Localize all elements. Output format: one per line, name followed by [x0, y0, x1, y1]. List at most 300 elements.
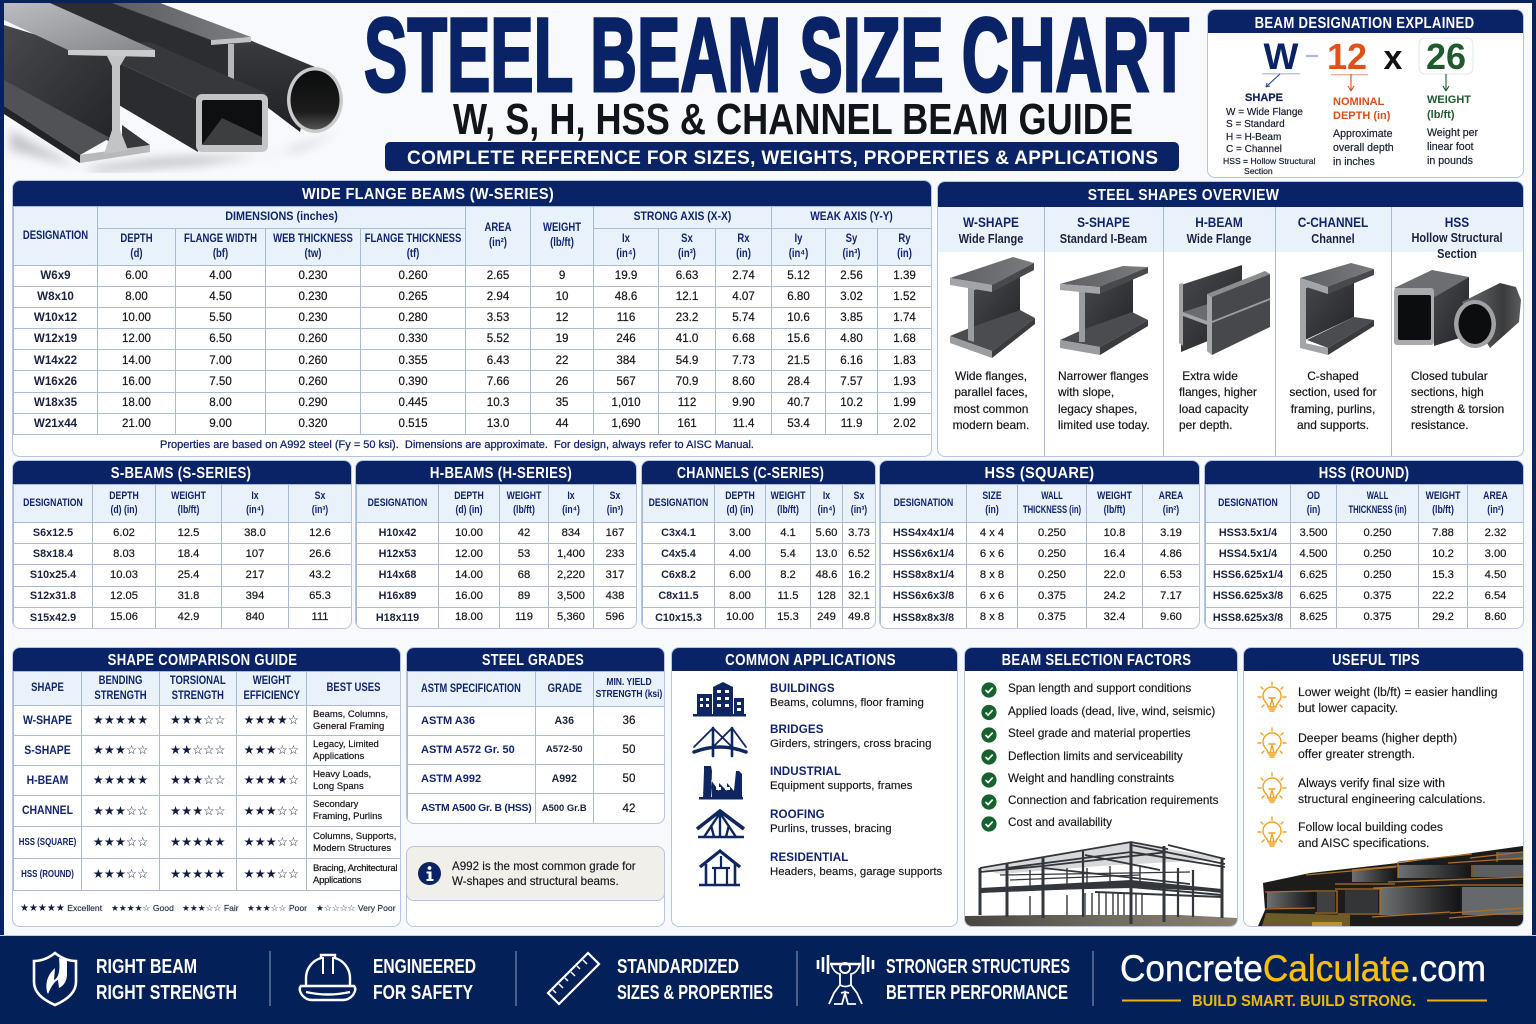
- table: S-series: 42.9: [178, 611, 199, 623]
- table: H-series: (lb/ft): [513, 504, 535, 516]
- table: S-series: 38.0: [244, 527, 266, 539]
- table: H-series: 3,500: [557, 590, 585, 602]
- table: H-series: DEPTH: [454, 490, 484, 502]
- table: H-series: 119: [515, 611, 533, 623]
- factor: weight: Weight and handling constraints: [1008, 772, 1174, 785]
- heading: HSS (SQUARE): [984, 465, 1094, 482]
- table: HSS round: 7.88: [1432, 527, 1454, 539]
- table: shape comparison: ★★★☆☆: [243, 866, 299, 881]
- description: H-beam: load capacity: [1179, 402, 1248, 416]
- table: W-series: 384: [616, 354, 636, 367]
- shape key: Section: [1244, 166, 1273, 176]
- description: HSS: sections, high: [1411, 385, 1484, 399]
- table: S-series: 15.06: [110, 611, 138, 623]
- table: HSS round: THICKNESS (in): [1348, 504, 1407, 516]
- table: HSS round: HSS8.625x3/8: [1213, 612, 1283, 624]
- table: W-series: 44: [556, 417, 568, 430]
- nominal depth key: in inches: [1333, 156, 1375, 168]
- table: HSS square: WALL: [1041, 490, 1063, 502]
- description: HSS: Closed tubular: [1411, 369, 1488, 383]
- table: S-series: WEIGHT: [171, 490, 206, 502]
- weight key: linear foot: [1427, 141, 1474, 153]
- table: HSS round: HSS6.625x1/4: [1213, 569, 1283, 581]
- rating legend: ★★★★★ Excellent: [20, 903, 102, 914]
- table: W-series: 22: [556, 354, 568, 367]
- subtitle: W, S, H, HSS & CHANNEL BEAM GUIDE: [453, 95, 1133, 144]
- table: HSS round: (lb/ft): [1432, 504, 1454, 516]
- table: H-series: 89: [518, 590, 530, 602]
- table: W-series: 11.9: [841, 417, 862, 430]
- application: bridges: Girders, stringers, cross bracing: [770, 738, 931, 750]
- weight key: [1427, 94, 1479, 167]
- footer text: right beam: [96, 956, 237, 1004]
- table: shape comparison: Beams, Columns,: [313, 708, 388, 720]
- table: C-series: 48.6: [816, 569, 837, 581]
- table: W-series: FLANGE WIDTH: [184, 232, 257, 245]
- table: HSS round: 0.250: [1364, 548, 1392, 560]
- table: C-series: 15.3: [777, 611, 799, 623]
- table: HSS square: 8 x 8: [980, 611, 1004, 623]
- description: HSS: strength & torsion: [1411, 402, 1504, 416]
- brand logo: ConcreteCalculate.com: [1120, 948, 1486, 989]
- icon: ruler: [548, 953, 599, 1004]
- heading: [672, 648, 957, 671]
- tip 1: Lower weight (lb/ft) = easier handling: [1298, 685, 1498, 699]
- table: W-series: 0.260: [298, 354, 328, 367]
- table: shape comparison: Heavy Loads,: [313, 768, 371, 780]
- table: HSS square: THICKNESS (in): [1023, 504, 1081, 516]
- table: W-series: STRONG AXIS (X-X): [634, 210, 731, 223]
- table: HSS round: 29.2: [1432, 611, 1454, 623]
- designation example W-12x26: 26: [1426, 36, 1466, 77]
- table: HSS square: 0.375: [1038, 590, 1066, 602]
- application: residential: RESIDENTIAL: [770, 851, 848, 864]
- heading: [13, 648, 400, 671]
- callout: A992 note: [407, 847, 664, 900]
- designation example W-12x26: x: [1384, 39, 1403, 77]
- thin back I-beam: [45, 3, 251, 96]
- weight key: in pounds: [1427, 155, 1473, 167]
- table: W-series: 14.00: [122, 354, 151, 367]
- icon: H-beam: [1179, 265, 1270, 355]
- table: W-series: 0.390: [399, 375, 428, 388]
- table: W-series: AREA: [485, 221, 512, 234]
- panel: H-beams: [356, 461, 636, 628]
- table: W-series: 3.85: [840, 311, 863, 324]
- table: steel grades: A36: [555, 715, 574, 727]
- table: HSS round: 22.2: [1432, 590, 1454, 602]
- column label: C-channel: Channel: [1311, 232, 1355, 246]
- table: C-series: [642, 484, 875, 628]
- weight key: WEIGHT: [1427, 94, 1471, 106]
- description: H-beam: per depth.: [1179, 418, 1233, 432]
- table: C-series: 249: [817, 611, 836, 623]
- table: W-series: (in): [736, 247, 751, 260]
- table: HSS square: 16.4: [1104, 548, 1125, 560]
- description: C-channel: [1289, 369, 1377, 432]
- heading: COMMON APPLICATIONS: [725, 652, 896, 669]
- table: S-series: 394: [246, 590, 264, 602]
- table: S-series: (in³): [312, 504, 328, 516]
- footer text: right beam: RIGHT STRENGTH: [96, 982, 237, 1004]
- table: HSS round: 3.00: [1485, 548, 1506, 560]
- table: HSS square: 4.86: [1160, 548, 1182, 560]
- table: H-series: 68: [518, 569, 530, 581]
- table: W-series: 1.99: [893, 396, 916, 409]
- table: steel grades: A500 Gr.B: [542, 802, 587, 813]
- table: H-series: H18x119: [376, 612, 419, 624]
- table: W-series: 7.73: [732, 354, 755, 367]
- shape key: [1223, 92, 1316, 176]
- table: shape comparison: TORSIONAL: [170, 674, 226, 687]
- table: HSS square: 8 x 8: [980, 569, 1004, 581]
- table: HSS square: HSS6x6x3/8: [893, 590, 954, 602]
- table: W-series: 1.93: [893, 375, 916, 388]
- panel: common applications: [672, 648, 957, 926]
- table: HSS square: 4 x 4: [980, 527, 1004, 539]
- table: shape comparison: STRENGTH: [94, 688, 147, 702]
- table: S-series: 43.2: [309, 569, 331, 581]
- rating legend: ★☆☆☆☆ Very Poor: [316, 903, 396, 914]
- table: W-series: (tf): [407, 247, 419, 260]
- table: S-series: S8x18.4: [33, 548, 73, 560]
- table: W-series: 21.5: [787, 354, 810, 367]
- table: shape comparison: ★★★☆☆: [243, 834, 299, 849]
- table: H-series: 167: [606, 527, 624, 539]
- footer text: right beam: RIGHT BEAM: [96, 956, 197, 978]
- table: shape comparison: STRENGTH: [172, 688, 224, 702]
- factor: applied loads: Applied loads (dead, live, wind, seismic): [1008, 705, 1215, 718]
- panel: HSS square: [880, 461, 1199, 628]
- table: W-series: (in): [897, 247, 912, 260]
- table: S-series: 31.8: [178, 590, 199, 602]
- table: H-series: 2,220: [557, 569, 585, 581]
- table: shape comparison: ★★★☆☆: [170, 772, 226, 787]
- panel: steel shapes overview: [938, 182, 1523, 456]
- table: W-series: Ry: [898, 232, 911, 245]
- table: S-series: 217: [246, 569, 264, 581]
- heading: [13, 181, 931, 206]
- description: H-beam: [1179, 369, 1257, 432]
- table: HSS square: 24.2: [1104, 590, 1125, 602]
- table: S-series: S15x42.9: [30, 612, 76, 624]
- table: H-series: (d) (in): [455, 504, 483, 516]
- table: HSS square: [880, 484, 1199, 628]
- table: shape comparison: ★★★☆☆: [93, 866, 148, 881]
- illustration: steel frame structure: [965, 842, 1237, 926]
- table: C-series: 8.2: [780, 569, 796, 581]
- table: W-series: 54.9: [676, 354, 698, 367]
- table: S-series: (lb/ft): [178, 504, 199, 516]
- table: H-series: 53: [518, 548, 530, 560]
- table: W-series: 161: [677, 417, 697, 430]
- table: C-series: (in³): [851, 504, 867, 516]
- icon: roofing truss: [697, 811, 744, 837]
- table: W-series: 0.260: [399, 269, 428, 282]
- table: W-series: 6.80: [787, 290, 810, 303]
- table: shape comparison: H-BEAM: [27, 774, 68, 787]
- heading: [642, 461, 875, 484]
- column label: W-shape: W-SHAPE: [963, 215, 1019, 230]
- table: steel grades: STRENGTH (ksi): [596, 689, 662, 700]
- table: C-series: C8x11.5: [658, 590, 699, 602]
- table: H-series: WEIGHT: [507, 490, 541, 502]
- application: bridges: BRIDGES: [770, 723, 824, 736]
- shape key: SHAPE: [1245, 92, 1283, 104]
- table: W-series: 246: [616, 332, 636, 345]
- footer text: stronger structures: BETTER PERFORMANCE: [886, 982, 1068, 1004]
- application: residential: Headers, beams, garage supports: [770, 866, 942, 878]
- heading: H-BEAMS (H-SERIES): [430, 465, 572, 482]
- table: shape comparison: ★★★☆☆: [93, 742, 148, 757]
- table: C-series: WEIGHT: [771, 490, 805, 502]
- table: W-series: 19: [556, 332, 568, 345]
- icon: W-shape beam: [950, 257, 1035, 358]
- table: H-series: H16x89: [379, 590, 416, 602]
- description: W-shape: [953, 369, 1029, 432]
- table: steel grades: ASTM A36: [421, 715, 475, 727]
- table: W-series: 112: [678, 396, 696, 409]
- table: W-series: 8.00: [209, 396, 232, 409]
- table: C-series: DEPTH: [725, 490, 755, 502]
- table: W-series: 116: [617, 311, 635, 324]
- table: C-series: 11.5: [778, 590, 798, 602]
- table: S-series: 6.02: [113, 527, 135, 539]
- heading: [407, 648, 664, 671]
- tip 2: Deeper beams (higher depth): [1298, 730, 1457, 744]
- table: H-series: 10.00: [455, 527, 483, 539]
- table: steel grades: 50: [623, 743, 635, 756]
- column label: W-shape: [958, 215, 1023, 246]
- table: W-series: 4.50: [209, 290, 232, 303]
- table: S-series: 111: [311, 611, 328, 623]
- table: shape comparison: ★★★★★: [93, 772, 148, 787]
- table: H-series: 12.00: [455, 548, 483, 560]
- table: S-series: (in⁴): [246, 504, 264, 516]
- table: C-series: 32.1: [848, 590, 870, 602]
- tip 1: but lower capacity.: [1298, 701, 1398, 715]
- table: S-series: 12.6: [309, 527, 331, 539]
- table: W-series: W6x9: [40, 269, 71, 282]
- illustration: stacked steel beams: [1258, 846, 1523, 926]
- shape key: C = Channel: [1226, 144, 1282, 155]
- table: W-series: (in⁴): [789, 247, 808, 260]
- table: W-series: (tw): [305, 247, 321, 260]
- icon: hard hat: [300, 955, 355, 1000]
- table: S-series: [13, 484, 351, 628]
- heading: [13, 461, 351, 484]
- footer text: standardized: SIZES & PROPERTIES: [617, 982, 773, 1004]
- table: steel grades: ASTM A500 Gr. B (HSS): [421, 803, 531, 814]
- heading: SHAPE COMPARISON GUIDE: [108, 652, 297, 669]
- table: HSS square: (lb/ft): [1104, 504, 1125, 516]
- table: shape comparison: WEIGHT: [252, 674, 290, 687]
- table: H-series: 42: [518, 527, 530, 539]
- table: W-series: 0.320: [298, 417, 328, 430]
- table: W-series: 567: [616, 375, 636, 388]
- table: H-series: 14.00: [455, 569, 483, 581]
- table: steel grades: 36: [623, 714, 635, 727]
- tip 4: and AISC specifications.: [1298, 836, 1429, 850]
- table: W-series: 41.0: [676, 332, 698, 345]
- table: HSS round: 2.32: [1485, 527, 1506, 539]
- factor: cost: Cost and availability: [1008, 816, 1112, 829]
- description: HSS: resistance.: [1411, 418, 1468, 432]
- table: W-series: Sy: [846, 232, 857, 245]
- rating legend: ★★★☆☆ Poor: [247, 903, 307, 914]
- table: HSS square: 3.19: [1160, 527, 1182, 539]
- table: steel grades: MIN. YIELD: [606, 676, 652, 688]
- table: W-series: 70.9: [676, 375, 698, 388]
- column label: H-beam: [1186, 215, 1251, 246]
- description: C-channel: section, used for: [1289, 385, 1377, 399]
- table: HSS square: 6.53: [1160, 569, 1182, 581]
- table: shape comparison: ★★★☆☆: [243, 803, 299, 818]
- table: H-series: 233: [606, 548, 624, 560]
- table: W-series: 9.00: [209, 417, 232, 430]
- table: C-series: C10x15.3: [655, 612, 702, 624]
- table: W-series: 2.74: [732, 269, 755, 282]
- table: shape comparison: ★★☆☆☆: [170, 742, 226, 757]
- table: W-series: 10: [556, 290, 568, 303]
- banner: COMPLETE REFERENCE FOR SIZES, WEIGHTS, PROPERTIES & APPLICATIONS: [407, 148, 1158, 169]
- description: C-channel: and supports.: [1297, 418, 1369, 432]
- table: W-series: W21x44: [34, 417, 77, 430]
- rectangular hollow section: [80, 42, 268, 152]
- table: HSS square: 7.17: [1160, 590, 1182, 602]
- heading: [880, 461, 1199, 484]
- heading: CHANNELS (C-SERIES): [677, 465, 824, 482]
- table: HSS round: 15.3: [1432, 569, 1454, 581]
- table: H-series: (in³): [607, 504, 623, 516]
- table: W-series: (in⁴): [616, 247, 636, 260]
- table: W-series: W16x26: [34, 375, 77, 388]
- table: W-series: Rx: [737, 232, 750, 245]
- heading: [938, 182, 1523, 207]
- table: shape comparison: ★★★☆☆: [93, 803, 148, 818]
- table: C-series: 13.0: [816, 548, 837, 560]
- table: C-series: 10.00: [726, 611, 754, 623]
- column label: S-shape: [1060, 215, 1147, 246]
- factor: connection: Connection and fabrication requirements: [1008, 794, 1219, 807]
- heading: [1205, 461, 1523, 484]
- table: H-series: DESIGNATION: [368, 497, 427, 509]
- table: HSS round: 0.375: [1364, 590, 1392, 602]
- description: H-beam: flanges, higher: [1179, 385, 1257, 399]
- table: W-series: 0.280: [399, 311, 428, 324]
- table: S-series: 840: [246, 611, 264, 623]
- column label: S-shape: Standard I-Beam: [1060, 232, 1147, 246]
- table: W-series: (in²): [489, 236, 507, 249]
- table: C-series: 4.1: [780, 527, 796, 539]
- table: W-series: (bf): [213, 247, 228, 260]
- table: H-series: Sx: [610, 490, 620, 502]
- icon: industrial: [699, 766, 743, 800]
- description: W-shape: parallel faces,: [954, 385, 1028, 399]
- panel: wide flange beams: [13, 181, 931, 456]
- designation example W-12x26: 12: [1327, 36, 1367, 77]
- application: residential: [770, 851, 942, 878]
- shape key: W = Wide Flange: [1226, 107, 1303, 118]
- table: W-series: WEAK AXIS (Y-Y): [810, 210, 893, 223]
- table: S-series: Ix: [251, 490, 259, 502]
- table: W-series: Ix: [622, 232, 630, 245]
- panel: beam designation explained: [1208, 10, 1523, 177]
- banner: [385, 142, 1179, 171]
- icon: info: [418, 862, 441, 885]
- table: W-series: 1,010: [612, 396, 641, 409]
- table: shape comparison: Legacy, Limited: [313, 738, 379, 750]
- table: W-series: W8x10: [37, 290, 74, 303]
- table: HSS square: 0.375: [1038, 611, 1066, 623]
- table: HSS square: 22.0: [1104, 569, 1125, 581]
- table: steel grades: ASTM A572 Gr. 50: [421, 744, 515, 756]
- table: shape comparison: Applications: [313, 874, 361, 886]
- table: W-series: 2.65: [487, 269, 509, 282]
- table: C-series: 6.00: [729, 569, 751, 581]
- table: shape comparison: ★★★★☆: [243, 772, 299, 787]
- table: H-series: 16.00: [455, 590, 483, 602]
- table: W-series: FLANGE THICKNESS: [365, 232, 461, 245]
- column label: H-beam: Wide Flange: [1187, 232, 1251, 246]
- table: W-series: [13, 206, 931, 435]
- nominal depth key: overall depth: [1333, 142, 1394, 154]
- table: shape comparison: BENDING: [99, 674, 142, 687]
- column label: H-beam: H-BEAM: [1195, 215, 1243, 230]
- table: W-series: 0.445: [399, 396, 428, 409]
- table: S-series: 10.03: [110, 569, 138, 581]
- table: W-series: 10.6: [787, 311, 810, 324]
- table: W-series: 0.265: [399, 290, 428, 303]
- table: W-series: (in³): [843, 247, 861, 260]
- application: bridges: [770, 723, 931, 750]
- table: H-series: H10x42: [379, 527, 416, 539]
- table: S-series: DEPTH: [109, 490, 139, 502]
- table: W-series: 23.2: [676, 311, 698, 324]
- table: HSS square: 0.250: [1038, 527, 1066, 539]
- table: W-series: W14x22: [34, 354, 77, 367]
- table: H-series: 1,400: [557, 548, 585, 560]
- table: W-series: 6.16: [840, 354, 863, 367]
- check icons: [981, 682, 997, 832]
- table: W-series: 7.66: [487, 375, 509, 388]
- heading: STEEL SHAPES OVERVIEW: [1088, 187, 1279, 204]
- table: shape comparison: General Framing: [313, 720, 384, 732]
- table: W-series: 4.00: [209, 269, 232, 282]
- table: shape comparison: ★★★★★: [170, 866, 226, 881]
- table: S-series: S12x31.8: [30, 590, 76, 602]
- footer text: engineered: [373, 956, 476, 1004]
- icon: hollow structural sections: [1394, 270, 1521, 348]
- table: HSS square: 0.250: [1038, 569, 1066, 581]
- table: W-series: 1.39: [893, 269, 916, 282]
- table: C-series: C6x8.2: [661, 569, 696, 581]
- table: W-series: 4.07: [732, 290, 755, 303]
- table: S-series: 12.5: [178, 527, 199, 539]
- table: S-series: S6x12.5: [33, 527, 73, 539]
- table: W-series: 3.53: [487, 311, 509, 324]
- table: H-series: [356, 484, 636, 628]
- brand logo: BUILD SMART. BUILD STRONG.: [1192, 993, 1416, 1010]
- table: W-series: 6.68: [732, 332, 755, 345]
- table: H-series: H12x53: [379, 548, 416, 560]
- title block: [364, 0, 1190, 171]
- table: steel grades: [407, 671, 664, 823]
- panel: channels: [642, 461, 875, 628]
- icon: residential house: [699, 851, 740, 885]
- table: S-series: S10x25.4: [30, 569, 76, 581]
- application: roofing: [770, 808, 892, 835]
